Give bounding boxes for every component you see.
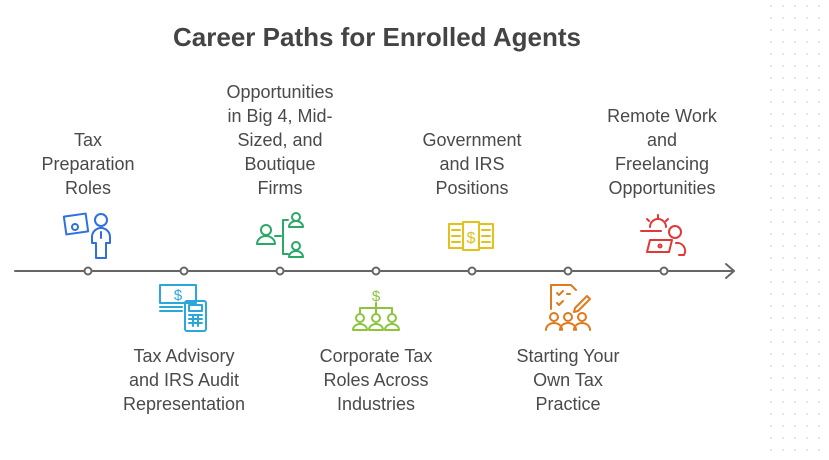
label: tax preparation [41, 130, 135, 198]
label: government: and IRS [439, 154, 505, 174]
label: big 4 [226, 82, 334, 198]
icon: practice checklist [546, 285, 590, 330]
icon: money calculator: $ [174, 287, 183, 304]
icon: org people [257, 213, 303, 257]
label: advisory: Representation [123, 394, 245, 414]
label: own practice [516, 346, 620, 414]
label: remote [607, 106, 717, 198]
label: tax preparation: Roles [65, 178, 111, 198]
title: Career Paths for Enrolled Agents [173, 22, 581, 52]
label: remote: Remote Work [607, 106, 717, 126]
icon: money person [64, 214, 110, 258]
icon: corporate hierarchy: $ [372, 288, 381, 305]
label: government: Positions [435, 178, 509, 198]
label: corporate: Industries [337, 394, 415, 414]
label: advisory [123, 346, 245, 414]
icon: money calculator [160, 285, 206, 331]
label: government: Government [422, 130, 522, 150]
label: tax preparation: Preparation [41, 154, 135, 174]
label: remote: Freelancing [615, 154, 709, 174]
label: remote: Opportunities [608, 178, 716, 198]
label: tax preparation: Tax [74, 130, 102, 150]
label: government [422, 130, 522, 198]
label: remote: and [647, 130, 677, 150]
icon: money stacks: $ [467, 230, 476, 247]
label: big 4: Boutique [244, 154, 316, 174]
label: big 4: in Big 4, Mid- [227, 106, 333, 126]
label: big 4: Firms [258, 178, 302, 198]
label: corporate [320, 346, 432, 414]
label: big 4: Opportunities [226, 82, 334, 102]
label: advisory: Tax Advisory [133, 346, 235, 366]
icon: remote worker [641, 215, 685, 255]
label: corporate: Roles Across [323, 370, 429, 390]
label: big 4: Sized, and [237, 130, 323, 150]
icon: money stacks [449, 222, 493, 250]
label: corporate: Corporate Tax [320, 346, 432, 366]
label: own practice: Starting Your [516, 346, 620, 366]
timeline axis [15, 264, 734, 278]
label: own practice: Practice [535, 394, 601, 414]
label: own practice: Own Tax [533, 370, 603, 390]
label: advisory: and IRS Audit [129, 370, 239, 390]
icon: corporate hierarchy [353, 288, 399, 330]
